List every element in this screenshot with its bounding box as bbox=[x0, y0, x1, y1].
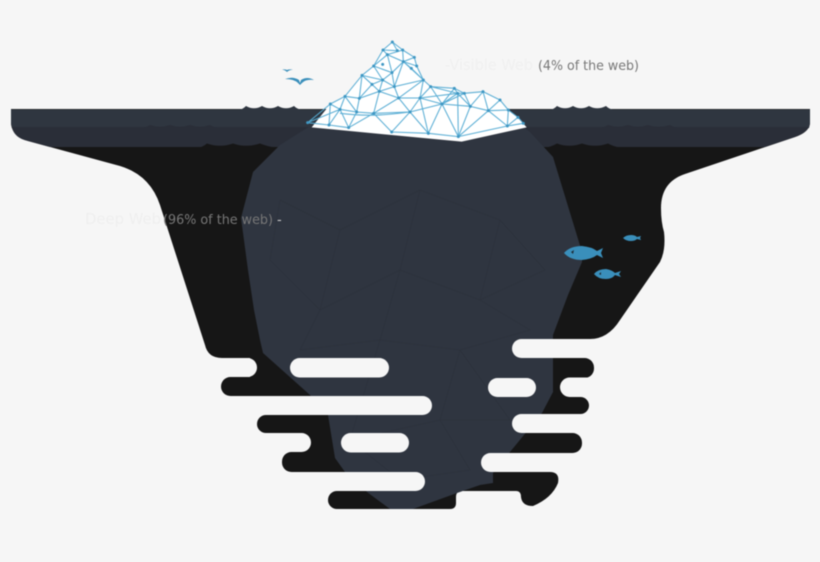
waves at surface, left bbox=[240, 106, 301, 110]
fish: medium bottom bbox=[594, 269, 621, 279]
ocean surface layers bbox=[11, 106, 810, 148]
mid waves, left bbox=[144, 125, 217, 128]
ice network nodes bbox=[306, 40, 525, 138]
bird: large bbox=[285, 78, 314, 85]
surface layer: lower water bbox=[12, 127, 809, 147]
visible iceberg tip with network bbox=[306, 40, 527, 142]
fish: small top bbox=[623, 235, 641, 241]
deep waves, right bbox=[545, 144, 620, 148]
mid waves, right bbox=[602, 125, 677, 128]
fish: large bbox=[564, 246, 603, 260]
faint network inside submerged iceberg bbox=[270, 190, 545, 480]
label: deep web: - bbox=[277, 213, 282, 228]
ice network lines bbox=[308, 42, 523, 137]
deep ocean silhouette bbox=[11, 109, 810, 509]
submerged iceberg bbox=[241, 126, 582, 509]
bird: small bbox=[282, 69, 293, 72]
label: visible web: (4% of the web) bbox=[538, 58, 639, 74]
deep waves, left bbox=[198, 144, 275, 148]
ice body bbox=[312, 42, 527, 142]
label: visible web: -Visible Web bbox=[445, 56, 533, 74]
label: deep web: Deep Web bbox=[85, 210, 161, 228]
surface layer: upper water bbox=[11, 109, 810, 128]
white cloud-like bars cutting the lower silhouette bbox=[0, 339, 820, 491]
label: deep web: (96% of the web) bbox=[163, 212, 273, 228]
waves at surface, right bbox=[551, 106, 613, 110]
